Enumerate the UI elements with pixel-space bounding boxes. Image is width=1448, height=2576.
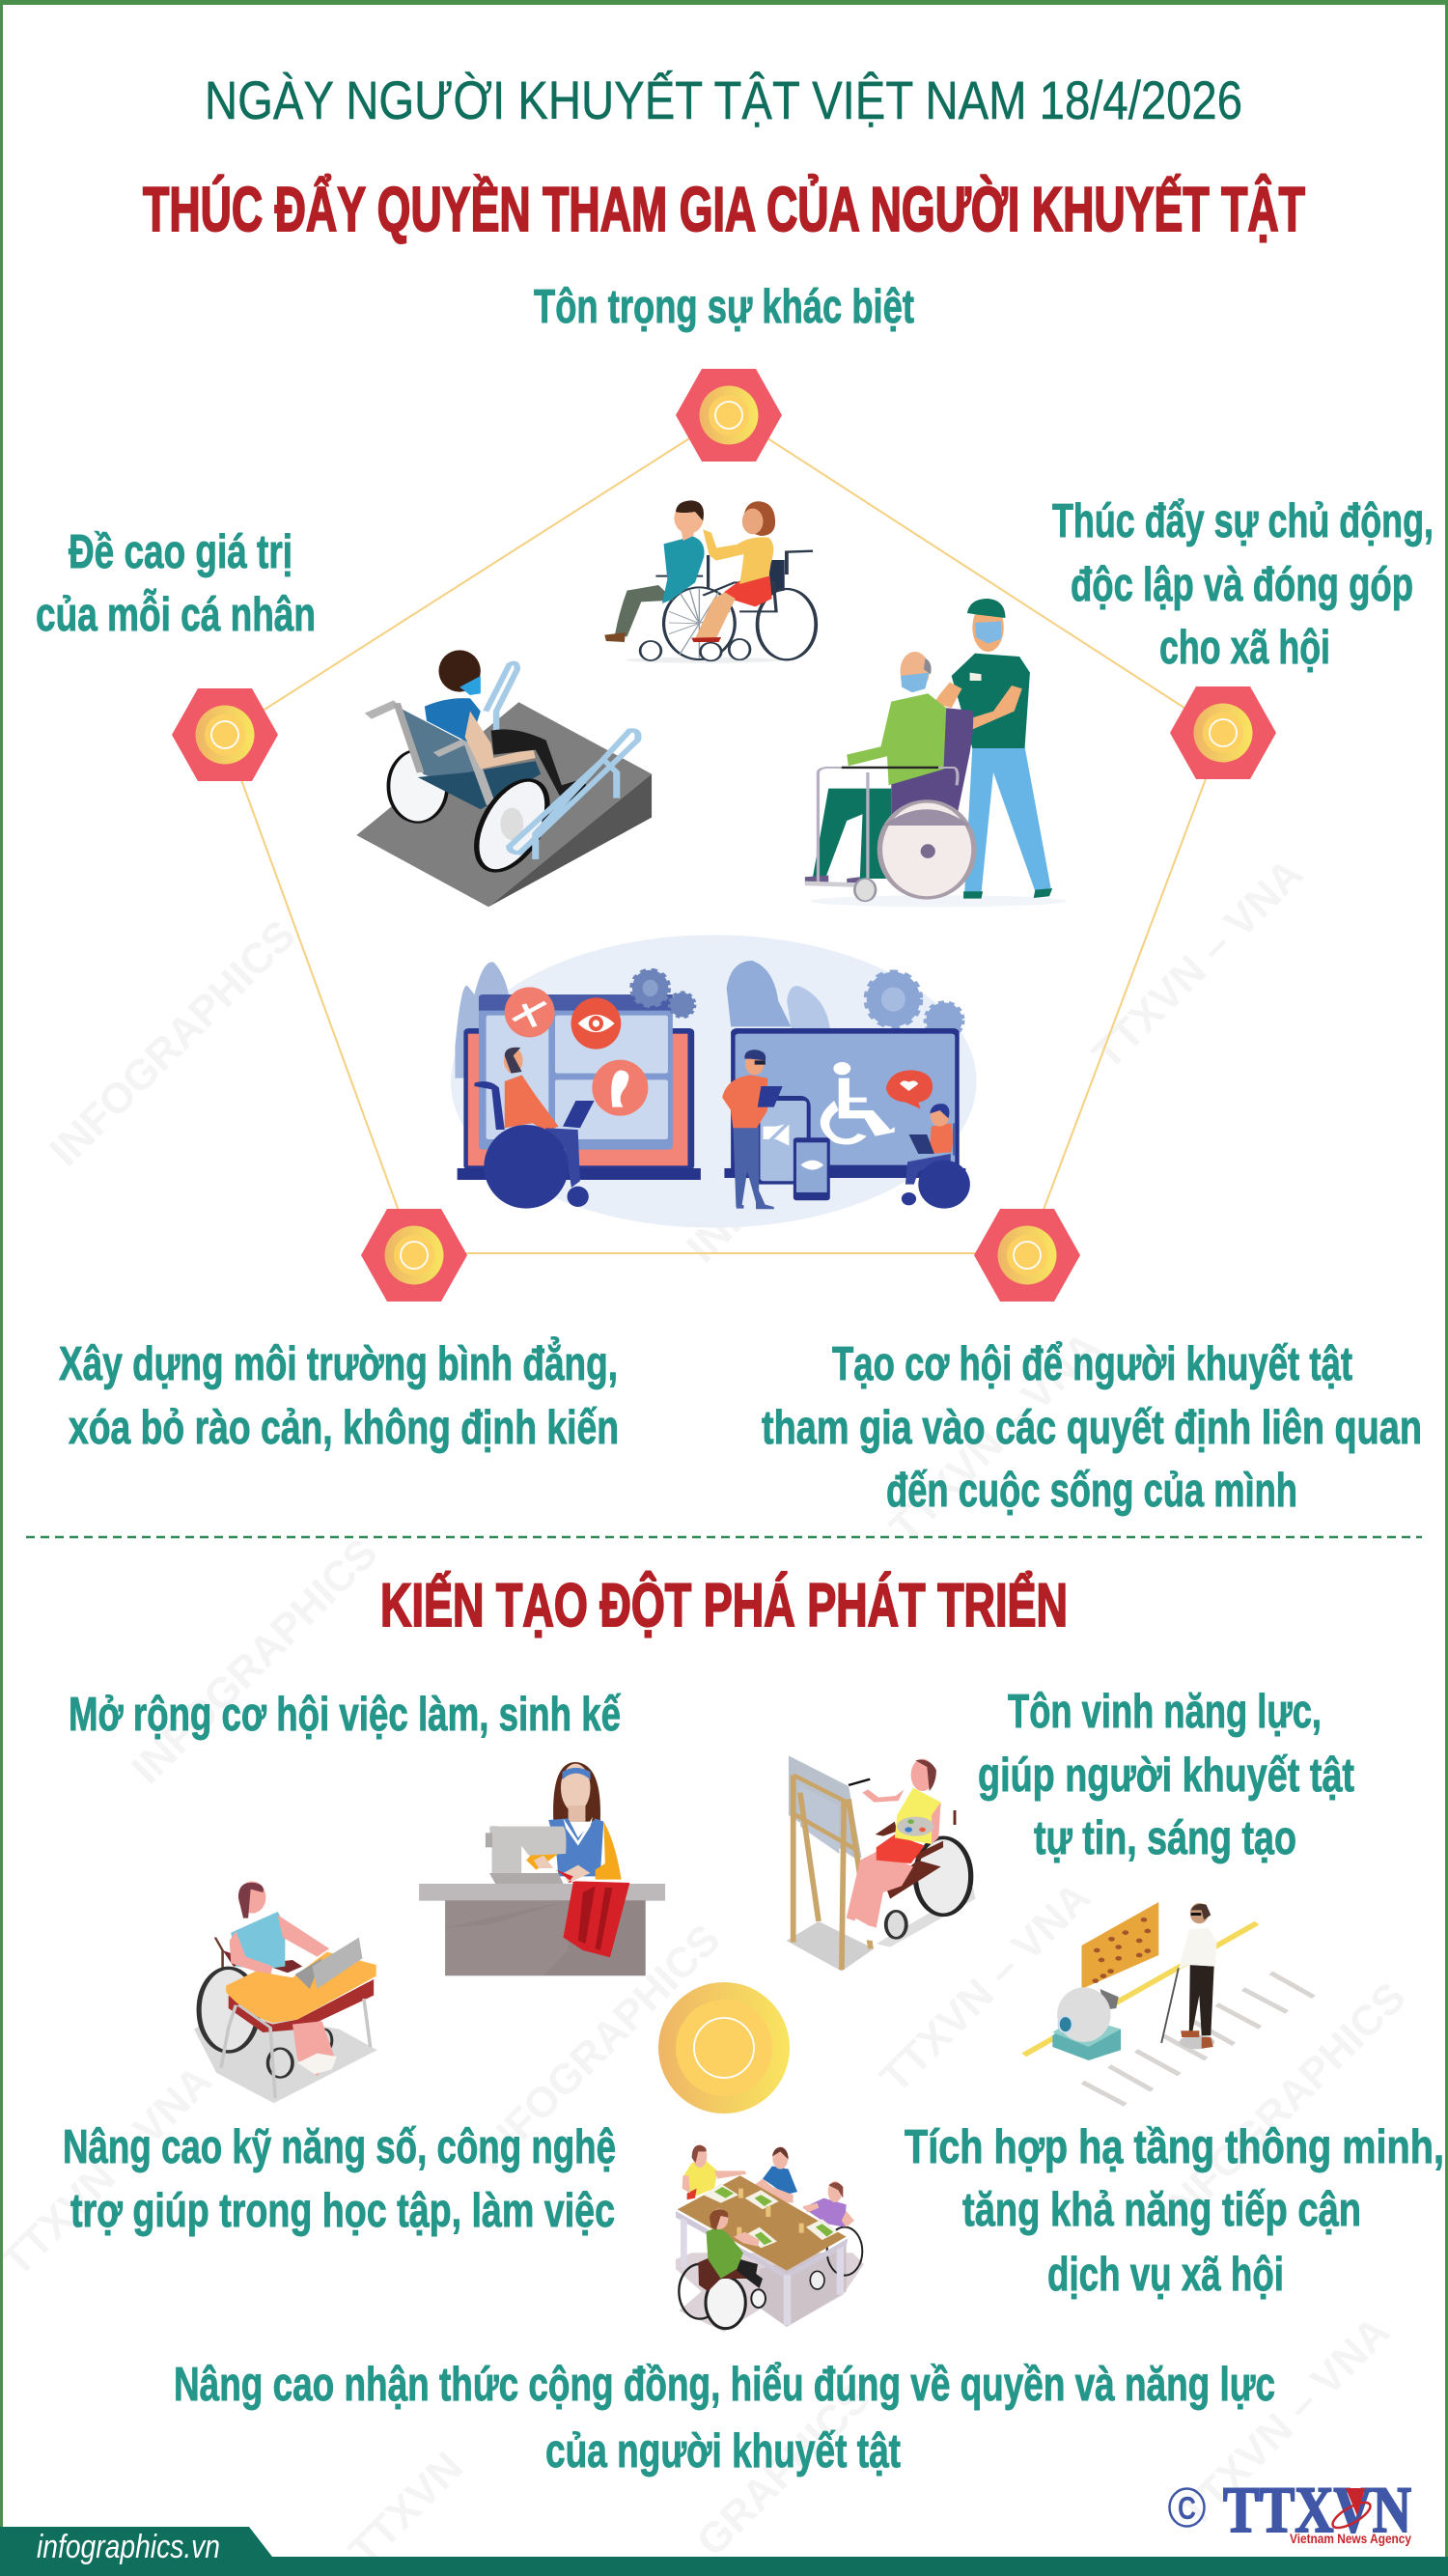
center sun bbox=[658, 1982, 790, 2114]
text: smart infrastructure bbox=[905, 2121, 1444, 2301]
watermarks: INFOGRAPHICS bbox=[123, 1529, 387, 1793]
watermarks: INFOGRAPHICS bbox=[1151, 1974, 1415, 2237]
left person in wheelchair bbox=[475, 1048, 595, 1209]
text: digital skills: trợ giúp trong học tập, làm việc bbox=[70, 2185, 615, 2237]
illustration: woman with laptop at desk bbox=[194, 1881, 377, 2103]
text: awareness: của người khuyết tật bbox=[545, 2425, 901, 2478]
text: right node: cho xã hội bbox=[1159, 622, 1330, 674]
text: honoring ability: Tôn vinh năng lực, bbox=[1008, 1686, 1322, 1738]
hexagon node: left bbox=[172, 688, 278, 781]
logo: TTXVN: TTXVN bbox=[1223, 2473, 1411, 2546]
watermarks: INFOGRAPHICS bbox=[41, 911, 305, 1175]
text: right node bbox=[1052, 495, 1434, 674]
watermarks: TTXVN – VNA bbox=[1083, 850, 1312, 1078]
illustration: woman at sewing machine bbox=[419, 1762, 665, 1975]
illustration: blind person with braille and smart camera bbox=[1024, 1902, 1314, 2105]
hexagon node: bottom left bbox=[361, 1209, 467, 1302]
left laptop bbox=[455, 962, 701, 1180]
text: digital skills: Nâng cao kỹ năng số, công nghệ bbox=[63, 2121, 616, 2173]
text: left node: của mỗi cá nhân bbox=[36, 589, 316, 641]
watermarks bbox=[0, 850, 1415, 2575]
illustration: accessible technology bbox=[451, 935, 977, 1228]
watermarks: INFOGRAPHICS bbox=[465, 1916, 730, 2179]
child in wheelchair bbox=[902, 1104, 970, 1209]
watermarks: INFOGRAPHICS bbox=[678, 1008, 942, 1272]
watermarks: TTXVN – VNA bbox=[880, 1323, 1109, 1552]
watermarks: TTXVN – VNA bbox=[1170, 2308, 1399, 2536]
heading: section two: KIẾN TẠO ĐỘT PHÁ PHÁT TRIỂN bbox=[380, 1571, 1068, 1639]
watermarks: TTXVN – VNA bbox=[871, 1873, 1100, 2102]
illustration: group around table bbox=[676, 2145, 864, 2332]
text: bottom right node bbox=[762, 1338, 1422, 1517]
illustration: couple in wheelchairs bbox=[604, 500, 816, 663]
text: bottom left node: Xây dựng môi trường bình đẳng, bbox=[59, 1337, 618, 1390]
text: bottom left node: xóa bỏ rào cản, không định kiến bbox=[69, 1402, 619, 1454]
hexagon node: top bbox=[676, 369, 782, 462]
illustration: painter in wheelchair bbox=[787, 1755, 976, 1972]
right tablet bbox=[724, 961, 965, 1200]
logo: TTXVN: C bbox=[1178, 2490, 1196, 2526]
watermarks: TTXVN bbox=[340, 2443, 472, 2575]
text: bottom right node: đến cuộc sống của mình bbox=[886, 1465, 1297, 1517]
hexagon node: bottom right bbox=[974, 1209, 1080, 1302]
divider: dashed bbox=[26, 1536, 1422, 1538]
standing person with tablet bbox=[722, 1050, 783, 1209]
watermarks: GRAPHICS bbox=[687, 2373, 879, 2565]
text: left node: Đề cao giá trị bbox=[69, 526, 292, 578]
footer: site label: infographics.vn bbox=[37, 2529, 220, 2565]
logo: TTXVN bbox=[1170, 2473, 1411, 2546]
footer bar bbox=[0, 2527, 1448, 2576]
text: bottom left node bbox=[59, 1337, 619, 1454]
pentagon lines bbox=[225, 413, 1223, 1253]
hexagon node: right bbox=[1170, 686, 1276, 779]
text: jobs: Mở rộng cơ hội việc làm, sinh kế bbox=[69, 1689, 622, 1741]
text: honoring ability: tự tin, sáng tạo bbox=[1034, 1812, 1296, 1864]
title: NGÀY NGƯỜI KHUYẾT TẬT VIỆT NAM 18/4/2026 bbox=[205, 70, 1242, 130]
text: smart infrastructure: dịch vụ xã hội bbox=[1047, 2249, 1284, 2301]
text: awareness bbox=[174, 2359, 1275, 2478]
logo: TTXVN: Vietnam News Agency bbox=[1290, 2532, 1411, 2546]
text: top node: Tôn trọng sự khác biệt bbox=[534, 281, 914, 333]
illustration: caregiver pushing elderly man bbox=[805, 599, 1067, 907]
text: honoring ability bbox=[978, 1686, 1354, 1864]
text: digital skills bbox=[63, 2121, 616, 2237]
illustration: wheelchair on ramp bbox=[356, 650, 652, 907]
text: left node bbox=[36, 526, 316, 641]
